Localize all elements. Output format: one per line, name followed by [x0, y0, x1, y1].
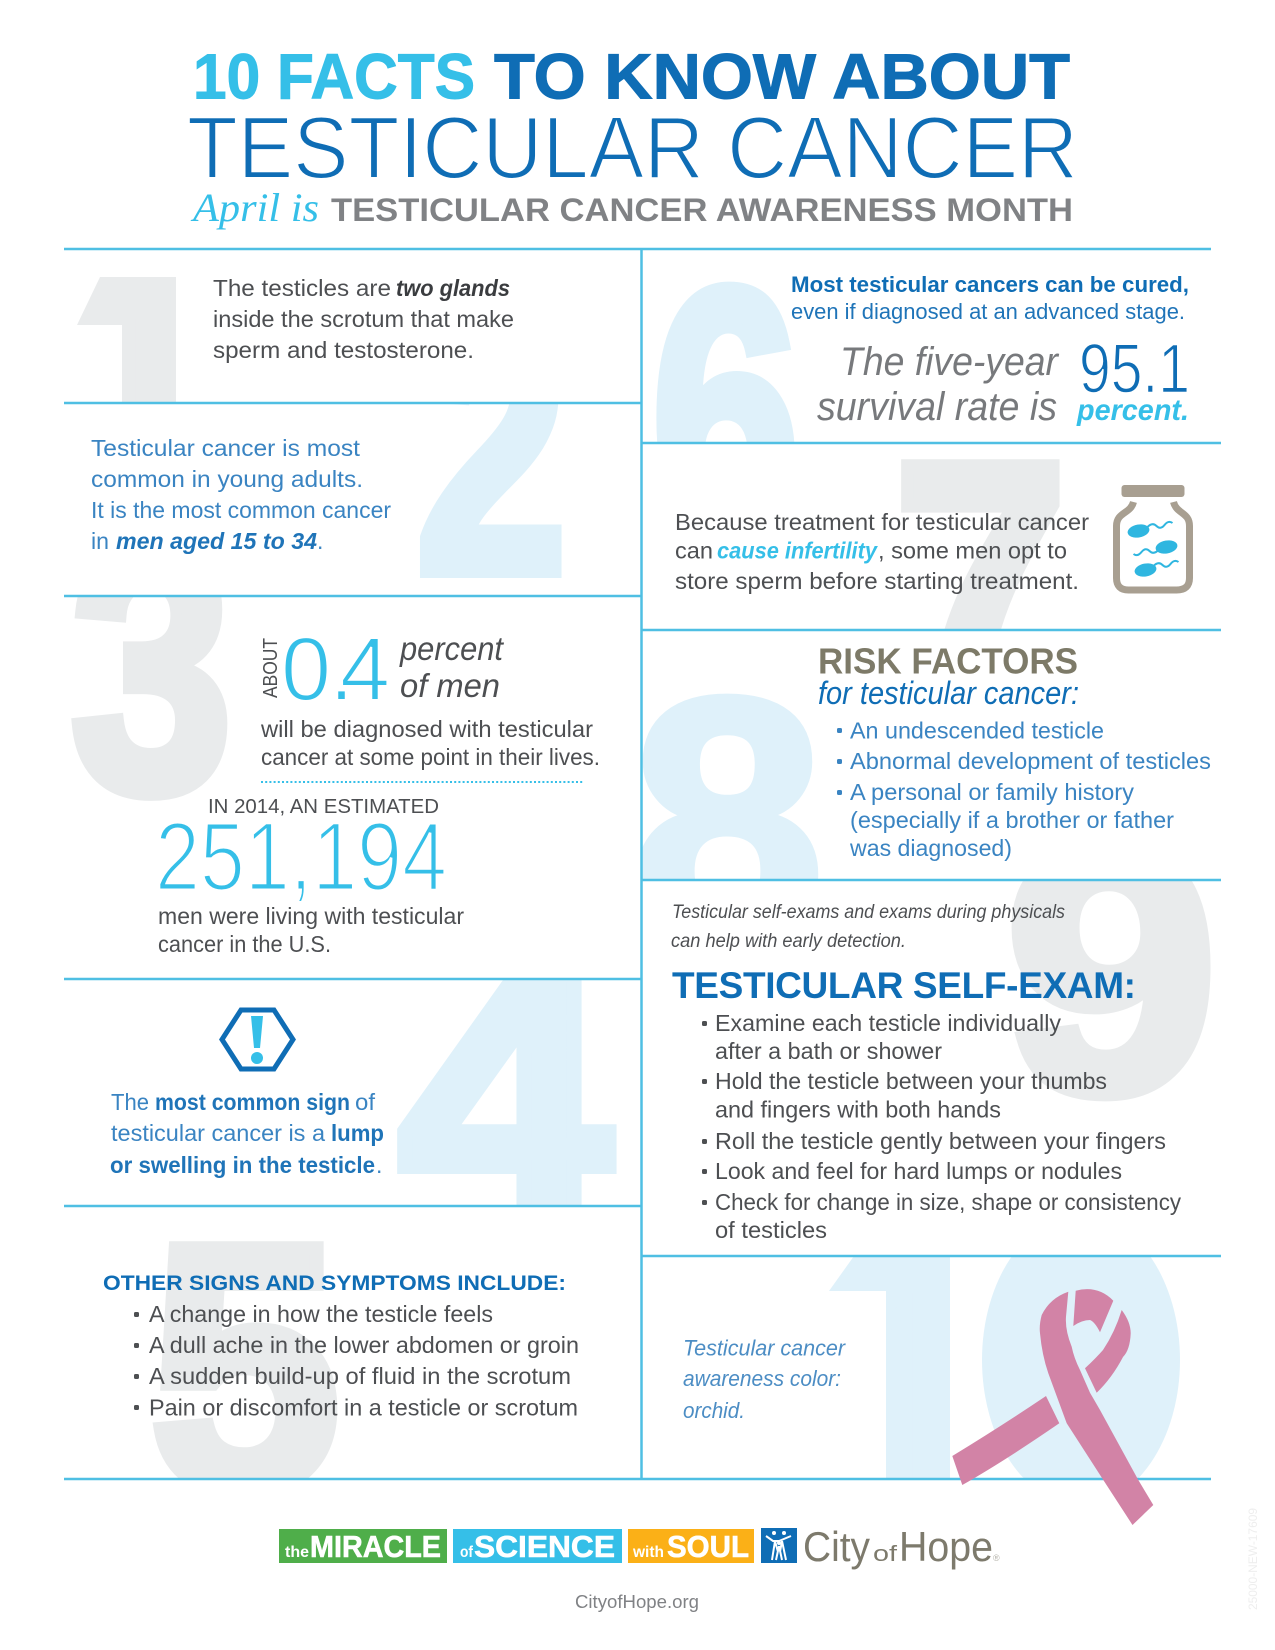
- panel: fact 6: [656, 276, 1188, 442]
- fact 4 text: of: [355, 1089, 376, 1115]
- early detection note: Testicular self-exams and exams during physicals: [672, 902, 1065, 923]
- fact 4 text: The: [111, 1089, 149, 1115]
- risk factors heading: RISK FACTORS: [818, 640, 1078, 682]
- number 4: 4: [399, 900, 613, 1291]
- website: CityofHope.org: [575, 1592, 699, 1612]
- logo: City of Hope family icon: [761, 1528, 797, 1563]
- fact 7 text: [675, 509, 1089, 594]
- fact 7 text: , some men opt to: [878, 538, 1067, 564]
- symptoms list: Pain or discomfort in a testicle or scrotum: [149, 1394, 578, 1420]
- number 10: 0: [996, 1198, 1166, 1534]
- stat 251,194: [155, 796, 464, 957]
- logo: City of Hope wordmark: of: [873, 1541, 898, 1566]
- self-exam heading: TESTICULAR SELF-EXAM:: [672, 965, 1136, 1006]
- fact 2 text: Testicular cancer is most: [91, 435, 361, 461]
- self-exam list: Hold the testicle between your thumbs: [715, 1068, 1107, 1094]
- logo: Miracle of Science with Soul: SCIENCE: [474, 1529, 615, 1564]
- symptoms heading: OTHER SIGNS AND SYMPTOMS INCLUDE:: [103, 1272, 566, 1295]
- survival rate stat: [817, 330, 1190, 429]
- symptoms list: [134, 1301, 579, 1420]
- fact 4 text: or swelling in the testicle: [110, 1152, 375, 1178]
- fact 4 text: .: [376, 1152, 382, 1178]
- logo: City of Hope wordmark: City: [803, 1523, 870, 1570]
- logo: City of Hope wordmark: Hope: [899, 1523, 993, 1570]
- logo: Miracle of Science with Soul: of: [460, 1544, 474, 1561]
- fact 2 text: It is the most common cancer: [91, 497, 391, 523]
- stat 0.4 percent: percent: [399, 630, 505, 667]
- panel: fact 5: [104, 1241, 578, 1478]
- divider lines: [64, 249, 1221, 1479]
- logo: Miracle of Science with Soul: MIRACLE: [310, 1529, 441, 1564]
- panel: fact 9: [672, 881, 1210, 1238]
- risk factors list: was diagnosed): [849, 835, 1012, 861]
- stat 0.4 percent: [260, 620, 600, 770]
- icon: sperm jar: [1116, 485, 1190, 590]
- self-exam list: Examine each testicle individually: [715, 1010, 1061, 1036]
- stat 0.4 percent: 0.4: [281, 620, 390, 720]
- stat 251,194: IN 2014, AN ESTIMATED: [208, 796, 439, 818]
- early detection note: [671, 902, 1065, 952]
- fact 7 text: cause infertility: [717, 538, 878, 564]
- fact 2 text: men aged 15 to 34: [116, 528, 317, 554]
- panel: fact 8: [642, 648, 1210, 879]
- number 7: 7: [894, 391, 1067, 782]
- stat 251,194: 251,194: [155, 802, 447, 911]
- fact 2 text: [91, 435, 391, 554]
- logo: City of Hope wordmark: [803, 1523, 1000, 1570]
- stat 0.4 percent: of men: [400, 667, 500, 704]
- fact 4 text: most common sign: [155, 1089, 350, 1115]
- fact 6 text: [791, 272, 1189, 324]
- awareness colour text: awareness color:: [683, 1366, 841, 1391]
- panel: fact 7: [676, 459, 1193, 629]
- panel: fact 10: [684, 1257, 1180, 1478]
- title: TESTICULAR CANCER: [187, 98, 1078, 197]
- risk factors heading: for testicular cancer:: [818, 675, 1079, 711]
- logo: Miracle of Science with Soul: the: [285, 1544, 309, 1561]
- fact 2 text: in: [91, 528, 109, 554]
- number 1: 1: [72, 215, 212, 606]
- fact 7 text: Because treatment for testicular cancer: [675, 509, 1089, 535]
- print code: 25000-NEW-17609: [1246, 1508, 1260, 1610]
- number 10: [829, 1257, 1180, 1478]
- panel: fact 3: [71, 597, 598, 952]
- number 3: 3: [71, 474, 232, 865]
- fact 2 text: common in young adults.: [91, 466, 363, 492]
- panel: fact 1: [77, 277, 513, 402]
- symptoms list: A change in how the testicle feels: [149, 1301, 493, 1327]
- title: TO KNOW ABOUT: [494, 40, 1070, 112]
- number 5: 5: [150, 1173, 340, 1564]
- icon: orchid ribbon: [952, 1289, 1153, 1525]
- number 10: 1: [851, 1176, 986, 1607]
- survival rate stat: percent.: [1076, 394, 1189, 427]
- self-exam list: after a bath or shower: [715, 1038, 942, 1064]
- symptoms list: A dull ache in the lower abdomen or groin: [149, 1332, 579, 1358]
- fact 4 text: testicular cancer is a: [111, 1120, 325, 1146]
- stat 0.4 percent: cancer at some point in their lives.: [261, 744, 600, 770]
- self-exam list: Roll the testicle gently between your fingers: [715, 1128, 1166, 1154]
- awareness colour text: orchid.: [683, 1398, 745, 1423]
- survival rate stat: survival rate is: [817, 385, 1057, 429]
- logo: City of Hope wordmark: ®: [993, 1553, 1000, 1563]
- self-exam list: Check for change in size, shape or consistency: [715, 1189, 1181, 1215]
- title: TESTICULAR CANCER AWARENESS MONTH: [331, 192, 1073, 228]
- survival rate stat: 95.1: [1079, 330, 1190, 408]
- fact 1 text: two glands: [396, 275, 510, 301]
- number 8: 8: [630, 626, 825, 1017]
- panel: fact 4: [110, 980, 616, 1205]
- risk factors list: An undescended testicle: [850, 718, 1104, 744]
- fact 7 text: can: [675, 538, 713, 564]
- title: 10 FACTS: [193, 40, 475, 112]
- survival rate stat: The five-year: [840, 340, 1060, 384]
- logo: Miracle of Science with Soul: [279, 1529, 754, 1564]
- early detection note: can help with early detection.: [671, 931, 906, 952]
- risk factors heading: [818, 640, 1079, 711]
- stat 251,194: men were living with testicular: [158, 903, 464, 929]
- risk factors list: A personal or family history: [850, 779, 1135, 805]
- fact 6 text: even if diagnosed at an advanced stage.: [791, 299, 1185, 324]
- stat 251,194: cancer in the U.S.: [158, 931, 331, 957]
- fact 1 text: sperm and testosterone.: [213, 337, 474, 363]
- risk factors list: Abnormal development of testicles: [850, 748, 1211, 774]
- number 6: 6: [652, 217, 799, 608]
- self-exam list: Look and feel for hard lumps or nodules: [715, 1158, 1122, 1184]
- awareness colour text: Testicular cancer: [683, 1336, 847, 1360]
- awareness colour text: [683, 1336, 847, 1423]
- number 9: 9: [1006, 775, 1217, 1166]
- fact 4 text: lump: [331, 1120, 384, 1146]
- fact 4 text: [110, 1089, 384, 1178]
- fact 1 text: The testicles are: [213, 275, 391, 301]
- icon: warning hexagon: [222, 1010, 293, 1069]
- fact 2 text: .: [317, 528, 323, 554]
- self-exam list: of testicles: [715, 1217, 827, 1243]
- stat 0.4 percent: ABOUT: [260, 638, 282, 698]
- logo: Miracle of Science with Soul: SOUL: [667, 1529, 749, 1564]
- fact 7 text: store sperm before starting treatment.: [675, 568, 1079, 594]
- title: [187, 40, 1078, 230]
- risk factors list: [837, 718, 1211, 861]
- fact 1 text: inside the scrotum that make: [213, 306, 514, 332]
- number 1: [77, 277, 176, 402]
- symptoms list: A sudden build-up of fluid in the scrotum: [149, 1363, 571, 1389]
- title: April is: [190, 185, 319, 230]
- stat 0.4 percent: will be diagnosed with testicular: [260, 716, 593, 742]
- panel: fact 2: [92, 404, 562, 578]
- risk factors list: (especially if a brother or father: [850, 807, 1174, 833]
- fact 1 text: [213, 275, 514, 363]
- fact 6 text: Most testicular cancers can be cured,: [791, 272, 1189, 297]
- self-exam list: [702, 1010, 1181, 1243]
- self-exam list: and fingers with both hands: [715, 1096, 1001, 1122]
- number 2: 2: [416, 255, 567, 646]
- logo: Miracle of Science with Soul: with: [632, 1544, 664, 1561]
